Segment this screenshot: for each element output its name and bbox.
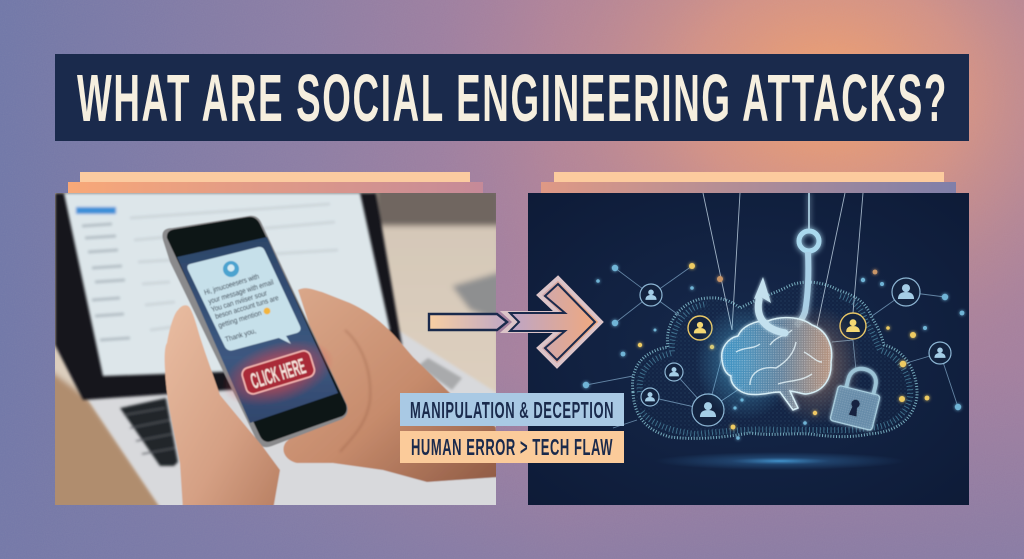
click here button: CLICK HERE xyxy=(248,353,309,394)
left hand xyxy=(165,305,280,510)
message text: beson account tuns are xyxy=(214,293,280,321)
fishing hook barb xyxy=(754,277,785,333)
stacked accent strips: right xyxy=(541,172,956,193)
phone screen xyxy=(177,237,338,423)
arrow head outer outline xyxy=(505,278,601,366)
laptop lid xyxy=(55,193,402,400)
label: human error over tech flaw: HUMAN ERROR > TECH FLAW xyxy=(411,434,613,460)
blurred room backdrop xyxy=(50,188,500,510)
message text: your message with email xyxy=(207,277,275,306)
person nodes xyxy=(640,278,951,426)
smartphone xyxy=(162,216,348,447)
title banner xyxy=(55,54,969,141)
hanging strings xyxy=(703,193,863,330)
message text: Hi, jmucoeesers with xyxy=(203,272,260,297)
arrow: from phone to brain xyxy=(429,278,601,366)
laptop xyxy=(55,193,500,510)
avatar icon xyxy=(223,261,239,277)
stacked accent strips: left xyxy=(68,172,483,193)
floor glow xyxy=(670,453,891,469)
blue person nodes xyxy=(640,278,951,426)
message text xyxy=(203,272,280,344)
panel: brain phishing illustration xyxy=(528,193,969,505)
label: manipulation and deception: MANIPULATION & DECEPTION xyxy=(410,397,614,423)
panel: phone scam photo xyxy=(50,188,500,510)
label: human error over tech flaw xyxy=(400,431,624,463)
arrow tail xyxy=(429,314,507,330)
laptop keyboard xyxy=(120,358,462,466)
yellow person nodes xyxy=(688,313,866,340)
right hand xyxy=(283,288,500,482)
message bubble xyxy=(187,247,301,351)
laptop base xyxy=(87,325,500,510)
brain xyxy=(700,309,859,420)
message text: getting mention xyxy=(217,308,263,330)
network links xyxy=(586,266,958,428)
message text: Thank you, xyxy=(224,326,257,344)
label: manipulation and deception xyxy=(400,393,624,426)
particle cloud xyxy=(632,282,917,438)
emoji xyxy=(264,308,270,314)
arrow head inner outline xyxy=(510,284,595,360)
message text: You can nviiser sour xyxy=(210,288,269,314)
fishing hook shank xyxy=(796,193,819,326)
padlock xyxy=(830,364,886,431)
laptop screen xyxy=(64,193,390,376)
glowing dots xyxy=(583,263,964,440)
click here button xyxy=(224,342,330,404)
